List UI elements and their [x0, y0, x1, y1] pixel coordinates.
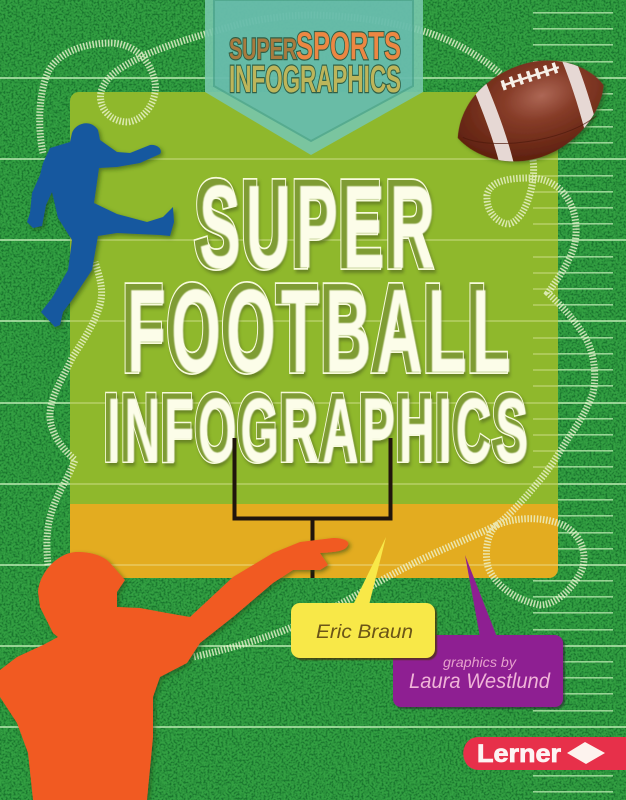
dotted play route lines	[40, 15, 595, 657]
title line: super	[195, 158, 440, 294]
panel: gold band	[70, 504, 558, 578]
publisher logo: lerner	[463, 737, 626, 770]
icon: open book diamond	[567, 742, 605, 764]
icon: blue kicker silhouette	[27, 123, 174, 327]
graphics credit: graphics by	[443, 654, 517, 670]
series name: super sports	[229, 25, 401, 68]
icon: football seam	[463, 96, 598, 163]
callout: author	[291, 537, 437, 660]
series name: super sports: SUPER	[229, 33, 297, 66]
panel: green end zone block	[70, 92, 558, 578]
icon: football	[458, 60, 608, 166]
badge: series ribbon	[205, 0, 423, 155]
author name: Eric Braun	[316, 622, 413, 643]
icon: football laces	[500, 62, 560, 91]
series name: super sports: SPORTS	[296, 25, 401, 68]
icon: goalpost	[234, 438, 390, 578]
series name: infographics: INFOGRAPHICS	[229, 59, 401, 101]
title: super football infographics	[104, 158, 532, 482]
illustrator name: Laura Westlund	[409, 670, 551, 693]
callout: illustrator	[393, 555, 565, 709]
icon: orange quarterback silhouette	[0, 538, 348, 800]
publisher name: Lerner	[477, 740, 561, 768]
icon: football stripes	[476, 62, 594, 162]
